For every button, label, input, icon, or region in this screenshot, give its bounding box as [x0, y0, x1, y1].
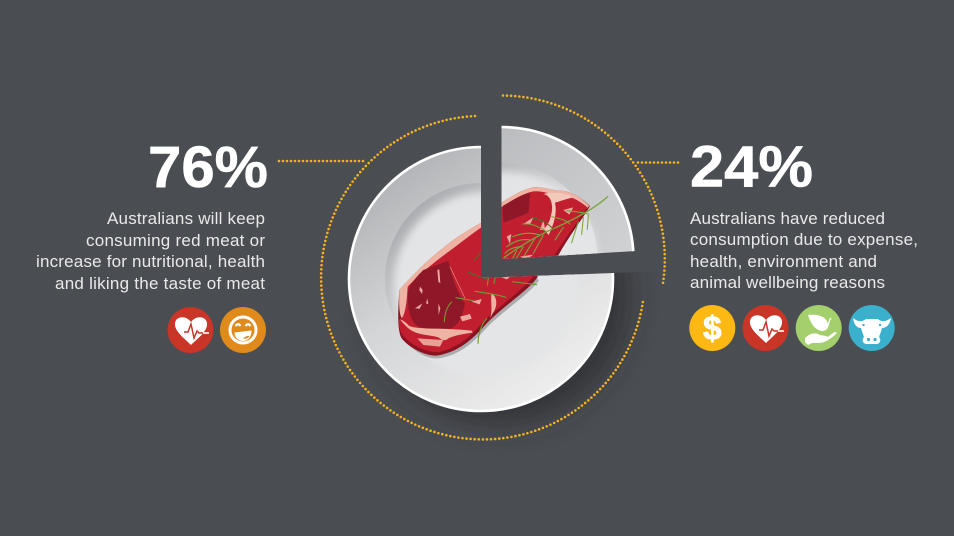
leader line right [638, 161, 679, 164]
text block: right description: consumption due to expense, [690, 230, 918, 249]
icon: dollar: $ [703, 310, 721, 346]
infographic canvas [37, 94, 916, 441]
text block: left description: consuming red meat or [86, 231, 265, 250]
rosemary sprig on slice [504, 197, 608, 258]
text block: right description [690, 209, 918, 292]
icon: hand holding leaf [796, 305, 842, 351]
dotted ring: 76% arc [321, 116, 643, 439]
heading: 76%: 76% [148, 135, 268, 200]
icon: heart health (left) [168, 307, 214, 353]
text block: left description: and liking the taste of meat [55, 274, 265, 293]
heading: 24%: 24% [690, 134, 813, 200]
icon: dollar [689, 305, 735, 351]
plate slice pulled out (24%) [502, 126, 634, 259]
dinner plate main portion [349, 147, 613, 411]
text block: right description: animal wellbeing reasons [690, 273, 885, 292]
leader line left [279, 160, 367, 162]
icon: heart health (right) [742, 305, 788, 351]
text block: right description: health, environment and [690, 252, 877, 271]
text block: left description: increase for nutritional, health [36, 252, 265, 271]
text block: left description [36, 209, 265, 293]
dotted ring: 24% arc [503, 96, 665, 283]
text block: left description: Australians will keep [107, 209, 265, 228]
plate shadow [384, 272, 638, 432]
steak on main plate [398, 222, 539, 358]
steak on slice [502, 187, 590, 259]
rosemary sprigs on main plate [444, 252, 537, 343]
text block: right description: Australians have reduced [690, 209, 885, 228]
icon: cow head [849, 305, 895, 351]
icon: laughing face [220, 307, 266, 353]
